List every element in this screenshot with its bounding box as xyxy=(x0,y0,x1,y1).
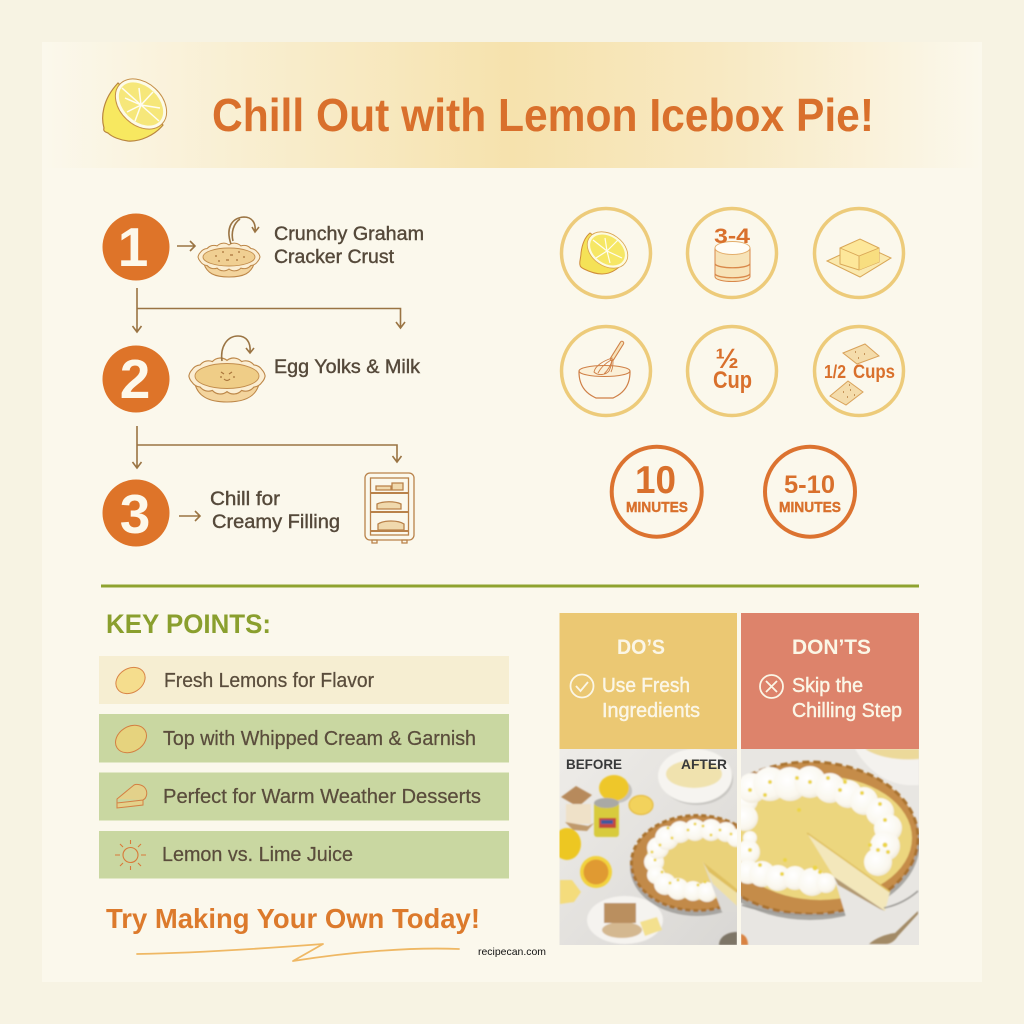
lemons and ingredients xyxy=(553,775,653,904)
icon: cross xyxy=(760,675,783,698)
step 3 label xyxy=(210,488,340,533)
after label: AFTER xyxy=(681,756,727,772)
don'ts heading: DON’TS xyxy=(792,636,871,659)
whipped cream ring xyxy=(732,766,902,896)
ingredient icon grid xyxy=(562,208,904,537)
cut slice xyxy=(807,832,891,916)
icon: fridge with pies xyxy=(365,473,414,543)
do's text xyxy=(602,675,700,722)
point: lemon vs lime xyxy=(99,831,509,878)
timer: 10 minutes xyxy=(612,447,702,537)
call to action: Try Making Your Own Today! xyxy=(106,903,480,934)
step 1 label xyxy=(274,223,424,268)
icon: whisk and bowl xyxy=(562,326,650,416)
step 3 badge: 3 xyxy=(120,483,150,545)
timer: 10 minutes: MINUTES xyxy=(626,499,688,516)
orange garnish xyxy=(741,934,748,945)
bowl of filling xyxy=(658,749,733,805)
pie whole xyxy=(741,760,919,921)
icon: half cup: Cup xyxy=(713,367,752,394)
icon: crackers half cups: 1/2 xyxy=(824,362,846,382)
icon: 3-4 cans xyxy=(688,208,776,298)
timer: 5-10 minutes: 5-10 xyxy=(784,471,835,499)
title: Chill Out with Lemon Icebox Pie! xyxy=(212,89,874,141)
icon: half cup xyxy=(688,326,776,416)
lemon zest xyxy=(748,776,890,876)
don'ts panel xyxy=(741,613,919,749)
key points panel xyxy=(99,609,546,961)
do's heading: DO’S xyxy=(617,636,665,659)
before photo xyxy=(560,749,737,945)
point: fresh lemons: Fresh Lemons for Flavor xyxy=(164,670,374,692)
timer: 5-10 minutes xyxy=(765,447,855,537)
connector: step 2 to step 3 xyxy=(132,426,402,468)
icon: 3-4 cans: 3-4 xyxy=(714,225,750,248)
do's text: Ingredients xyxy=(602,700,700,722)
icon: check xyxy=(570,674,594,698)
timer: 10 minutes: 10 xyxy=(635,459,676,502)
point: whipped cream xyxy=(99,714,509,762)
step 3 label: Creamy Filling xyxy=(212,511,340,533)
don'ts text xyxy=(792,675,902,722)
arrow: step 3 to label xyxy=(179,511,200,521)
spoon xyxy=(719,932,737,945)
icon: crackers half cups xyxy=(814,326,904,416)
arrow: step 1 to pie xyxy=(177,241,195,251)
icon: lemon xyxy=(562,208,650,298)
icon: half cup: ½ xyxy=(715,343,739,374)
steps flow xyxy=(102,214,424,546)
bowl xyxy=(855,749,919,785)
icon: custard pie xyxy=(189,336,265,402)
point: whipped cream: Top with Whipped Cream & Garnish xyxy=(163,728,476,750)
step 2 badge xyxy=(102,346,170,412)
step 2 label: Egg Yolks & Milk xyxy=(274,356,420,378)
step 2 badge: 2 xyxy=(120,348,150,410)
don'ts text: Chilling Step xyxy=(792,700,902,722)
icon: crackers half cups: Cups xyxy=(853,362,895,383)
header band xyxy=(42,42,982,168)
don'ts text: Skip the xyxy=(792,675,863,697)
spoon xyxy=(869,911,918,944)
source credit: recipecan.com xyxy=(478,946,546,958)
before label: BEFORE xyxy=(566,756,622,772)
point: warm weather xyxy=(99,772,509,820)
step 1 label: Cracker Crust xyxy=(274,246,395,268)
pie xyxy=(629,813,737,916)
step 1 label: Crunchy Graham xyxy=(274,223,424,245)
icon: graham crust pie xyxy=(198,217,260,277)
step 3 badge xyxy=(102,480,170,546)
plate with cracker and butter xyxy=(587,896,663,944)
do's panel xyxy=(560,613,737,749)
do's text: Use Fresh xyxy=(602,675,690,697)
squiggle underline xyxy=(137,944,459,961)
step 1 badge xyxy=(102,214,170,280)
step 3 label: Chill for xyxy=(210,488,281,510)
point: fresh lemons xyxy=(99,656,509,704)
connector: step 1 to step 2 xyxy=(132,288,405,332)
pie pan edge xyxy=(742,891,918,915)
icon: butter xyxy=(814,208,904,298)
timer: 5-10 minutes: MINUTES xyxy=(779,499,841,516)
key points heading: KEY POINTS: xyxy=(106,609,271,639)
point: lemon vs lime: Lemon vs. Lime Juice xyxy=(162,844,353,866)
icon: lemon half xyxy=(103,69,177,141)
after photo xyxy=(741,749,919,945)
step 1 badge: 1 xyxy=(118,216,148,278)
point: warm weather: Perfect for Warm Weather Desserts xyxy=(163,786,481,808)
